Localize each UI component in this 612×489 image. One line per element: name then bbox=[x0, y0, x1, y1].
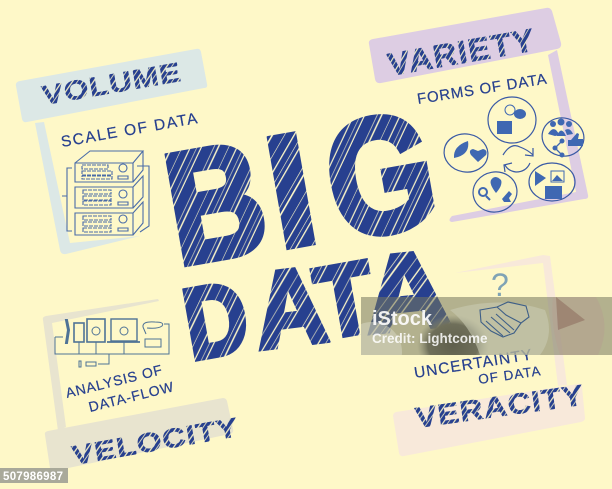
icon: search, pin and tools bbox=[479, 177, 512, 202]
icon: leaf and heart bbox=[454, 141, 487, 162]
velocity frame bbox=[43, 299, 159, 431]
letter A: A bbox=[358, 227, 454, 356]
veracity heading: VERACITY bbox=[413, 379, 586, 435]
letter G: G bbox=[312, 76, 449, 274]
veracity subtitle: OF DATA bbox=[477, 363, 542, 387]
veracity header band bbox=[393, 384, 585, 456]
volume heading: VOLUME bbox=[40, 58, 184, 111]
variety subtitle: FORMS OF DATA bbox=[416, 71, 549, 108]
watermark: iStock credit banner bbox=[361, 297, 612, 355]
panel: volume bbox=[16, 49, 207, 254]
letter T: T bbox=[307, 239, 383, 361]
panel: veracity bbox=[393, 255, 586, 456]
panel: variety bbox=[369, 8, 588, 222]
banner background bbox=[361, 297, 612, 355]
velocity subtitle bbox=[64, 361, 176, 415]
letter B: B bbox=[153, 108, 278, 298]
icon: connected devices bbox=[55, 319, 169, 367]
title: BIG DATA bbox=[153, 76, 454, 381]
panel: velocity bbox=[43, 299, 241, 471]
icon: people, thumb and share bbox=[548, 118, 583, 158]
id tag text: 507986987 bbox=[3, 471, 63, 483]
velocity subtitle: DATA-FLOW bbox=[87, 378, 176, 415]
letter I: I bbox=[254, 101, 328, 281]
iStock wordmark: iStock bbox=[372, 308, 433, 330]
image id tag bbox=[0, 468, 68, 483]
velocity heading: VELOCITY bbox=[70, 412, 241, 471]
veracity subtitle: UNCERTAINTY bbox=[413, 346, 534, 382]
variety header band bbox=[369, 8, 561, 83]
veracity frame bbox=[455, 255, 567, 386]
credit text: Credit: Lightcome bbox=[372, 331, 488, 346]
variety frame bbox=[450, 50, 588, 222]
volume header band bbox=[16, 49, 207, 122]
velocity header band bbox=[45, 398, 233, 471]
velocity subtitle: ANALYSIS OF bbox=[64, 361, 164, 401]
variety heading: VARIETY bbox=[385, 22, 538, 83]
icon: envelope and speech bubbles bbox=[497, 105, 526, 134]
letter A: A bbox=[247, 243, 333, 372]
icon: play, picture and film bbox=[535, 171, 564, 199]
id tag background bbox=[0, 468, 68, 483]
icon group: forms of data bbox=[441, 97, 588, 216]
icon: question mark: ? bbox=[491, 267, 509, 303]
handshake outline bbox=[480, 302, 529, 337]
volume subtitle: SCALE OF DATA bbox=[60, 110, 200, 151]
letter D: D bbox=[175, 259, 257, 381]
volume frame bbox=[35, 122, 140, 254]
icon: server rack bbox=[62, 151, 149, 235]
sketched circles bbox=[441, 97, 588, 216]
